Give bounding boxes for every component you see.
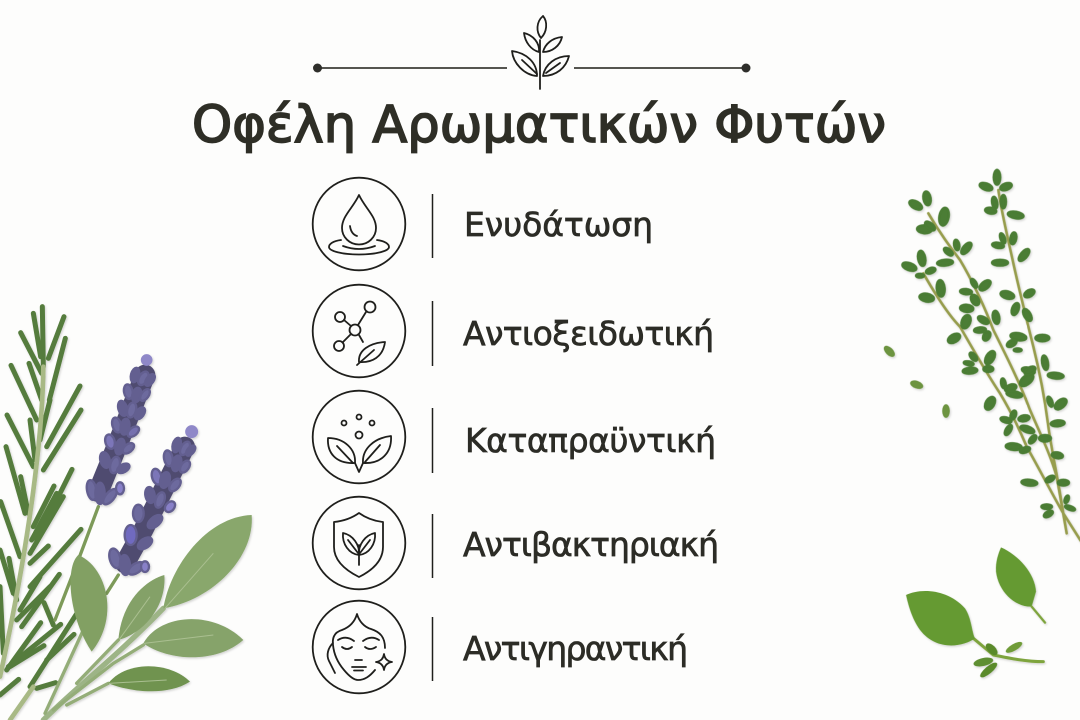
divider (432, 301, 434, 366)
sage leaves (43, 515, 252, 720)
ornament: line with sprig (313, 16, 750, 89)
lavender sprig 2 (107, 426, 197, 577)
icon: molecule and leaf (313, 285, 405, 377)
label: Αντιγηραντική (463, 629, 688, 668)
label: Αντιβακτηριακή (463, 525, 719, 564)
basil leaf small (996, 547, 1036, 607)
lavender sprig 1 (85, 355, 157, 507)
lavender stems (55, 507, 118, 620)
divider (432, 617, 434, 681)
illustration: herbs bottom left (rosemary, lavender, sage) (0, 307, 252, 720)
icon: plant with dots (313, 391, 405, 483)
row 3: soothing (313, 391, 716, 483)
title: Οφέλη Αρωματικών Φυτών (192, 96, 886, 155)
divider (432, 194, 434, 258)
row 1: hydration (313, 178, 653, 270)
label: Καταπραϋντική (465, 421, 716, 460)
basil stem and small leaves (973, 638, 1043, 680)
divider (432, 408, 434, 473)
thyme leaves (901, 170, 1076, 519)
icon: shield with plant (313, 497, 405, 589)
divider (432, 514, 434, 578)
rosemary (0, 307, 81, 720)
scattered thyme leaves (882, 344, 949, 417)
basil leaf large (906, 591, 975, 645)
icon: face with sparkle (313, 601, 405, 693)
illustration: basil leaves bottom right (906, 547, 1045, 680)
row 2: antioxidant (313, 285, 714, 377)
basil petiole and veins (1032, 607, 1045, 623)
row 5: anti-ageing (313, 601, 688, 693)
icon: water drop (313, 178, 405, 270)
label: Αντιοξειδωτική (463, 314, 714, 353)
row 4: antibacterial (313, 497, 719, 589)
label: Ενυδάτωση (464, 205, 653, 244)
thyme stems (923, 190, 1080, 541)
illustration: thyme sprigs right (882, 170, 1080, 541)
